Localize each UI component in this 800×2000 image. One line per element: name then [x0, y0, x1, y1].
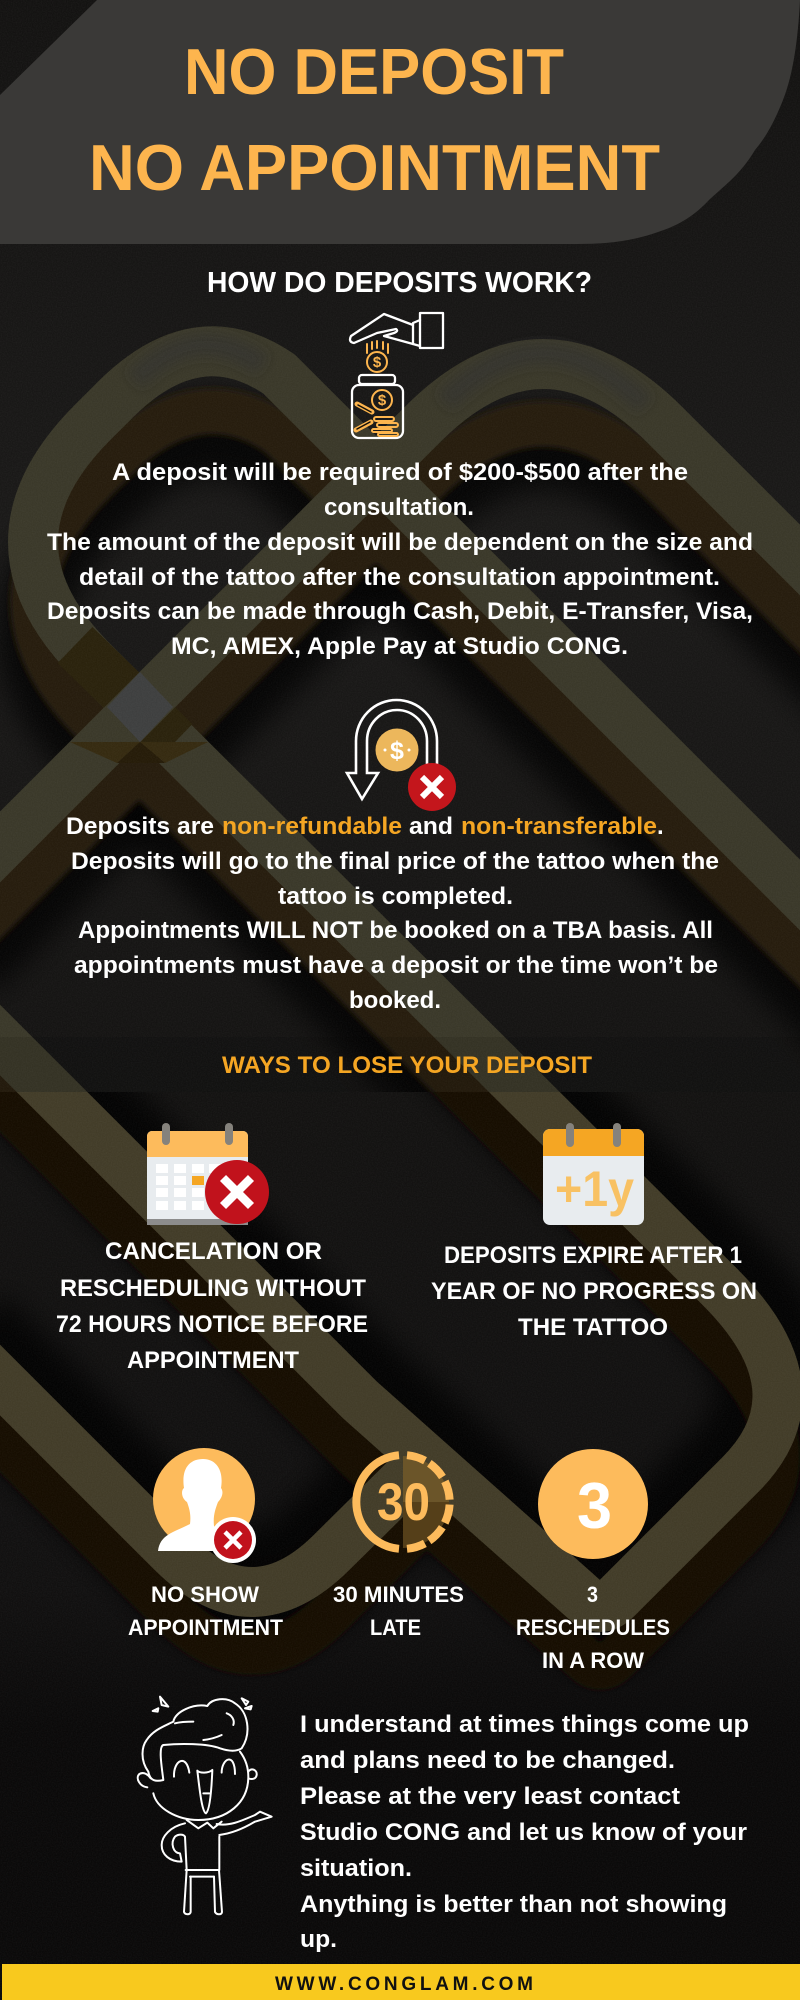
text block: deposit amount: consultation.: [324, 494, 474, 521]
text block: deposits expire: [431, 1242, 757, 1341]
label: no show appointment: APPOINTMENT: [128, 1615, 284, 1640]
text block: closing note: [300, 1711, 749, 1953]
icon: refund denied arrow: $: [390, 737, 404, 765]
text block: non-refundable rules: and: [409, 813, 453, 840]
text block: non-refundable rules: Deposits will go to the final price of the tattoo when the: [71, 848, 719, 875]
heading: how do deposits work: HOW DO DEPOSITS WORK?: [207, 267, 592, 299]
text block: non-refundable rules: tattoo is completed.: [278, 883, 513, 910]
label: no show appointment: [128, 1582, 284, 1640]
text block: deposit amount: MC, AMEX, Apple Pay at Studio CONG.: [171, 633, 628, 660]
text block: closing note: Studio CONG and let us know of your: [300, 1819, 747, 1846]
text block: cancelation: RESCHEDULING WITHOUT: [60, 1275, 366, 1302]
icon: 30 minutes clock: [356, 1455, 450, 1549]
icon: hand dropping coin into jar: $: [373, 354, 382, 371]
footer band: [2, 1964, 800, 2000]
icon: number three circle: [538, 1449, 648, 1559]
text block: closing note: Anything is better than not showing: [300, 1891, 727, 1918]
title: [89, 35, 660, 204]
title: NO APPOINTMENT: [89, 131, 660, 204]
text block: cancelation: CANCELATION OR: [105, 1238, 322, 1265]
icon: refund denied arrow: [347, 700, 456, 811]
title: NO DEPOSIT: [184, 35, 564, 108]
text block: closing note: Please at the very least contact: [300, 1783, 680, 1810]
icon: calendar with x: [147, 1123, 269, 1225]
footer website: WWW.CONGLAM.COM: [275, 1974, 533, 1995]
icon: 30 minutes clock: 30: [377, 1473, 430, 1532]
text block: deposits expire: DEPOSITS EXPIRE AFTER 1: [444, 1242, 742, 1269]
label: 30 minutes late: LATE: [370, 1615, 421, 1640]
text block: non-refundable rules: Deposits are: [66, 813, 214, 840]
text block: deposits expire: THE TATTOO: [518, 1314, 668, 1341]
text block: closing note: and plans need to be changed.: [300, 1747, 675, 1774]
text block: non-refundable rules: appointments must have a deposit or the time won’t be: [74, 952, 718, 979]
icon: hand dropping coin into jar: [350, 313, 443, 438]
panel: title shape: [0, 0, 800, 244]
label: no show appointment: NO SHOW: [151, 1582, 259, 1607]
label: 3 reschedules in a row: RESCHEDULES: [516, 1615, 670, 1640]
heading: ways to lose your deposit: WAYS TO LOSE YOUR DEPOSIT: [222, 1052, 592, 1079]
text block: deposit amount: detail of the tattoo after the consultation appointment.: [79, 564, 720, 591]
text block: non-refundable rules: [66, 813, 719, 1014]
text block: deposit amount: The amount of the deposit will be dependent on the size and: [47, 529, 753, 556]
text block: non-refundable rules: Appointments WILL NOT be booked on a TBA basis. All: [78, 917, 713, 944]
illustration: laughing man: [138, 1697, 272, 1914]
text block: deposit amount: A deposit will be required of $200-$500 after the: [112, 459, 688, 486]
text block: non-refundable rules: non-transferable: [461, 813, 657, 840]
label: 3 reschedules in a row: IN A ROW: [542, 1648, 644, 1673]
label: 3 reschedules in a row: [516, 1582, 670, 1673]
text block: cancelation: APPOINTMENT: [127, 1347, 299, 1374]
icon: no show person: [153, 1448, 256, 1563]
text block: closing note: situation.: [300, 1855, 412, 1882]
text block: deposits expire: YEAR OF NO PROGRESS ON: [431, 1278, 757, 1305]
icon: number three circle: 3: [577, 1469, 612, 1542]
icon: calendar plus one year: +1y: [555, 1161, 634, 1217]
text block: cancelation: [56, 1238, 368, 1374]
label: 3 reschedules in a row: 3: [587, 1582, 598, 1607]
text block: non-refundable rules: .: [657, 813, 664, 840]
icon: calendar plus one year: [543, 1123, 644, 1225]
text block: non-refundable rules: non-refundable: [222, 813, 402, 840]
label: 30 minutes late: 30 MINUTES: [333, 1582, 464, 1607]
text block: non-refundable rules: booked.: [349, 987, 441, 1014]
text block: deposit amount: [47, 459, 753, 660]
label: 30 minutes late: [333, 1582, 464, 1640]
text block: deposit amount: Deposits can be made through Cash, Debit, E-Transfer, Visa,: [47, 598, 753, 625]
text block: closing note: up.: [300, 1926, 337, 1953]
icon: hand dropping coin into jar: $: [378, 392, 387, 409]
text block: cancelation: 72 HOURS NOTICE BEFORE: [56, 1311, 368, 1338]
text block: closing note: I understand at times things come up: [300, 1711, 749, 1738]
